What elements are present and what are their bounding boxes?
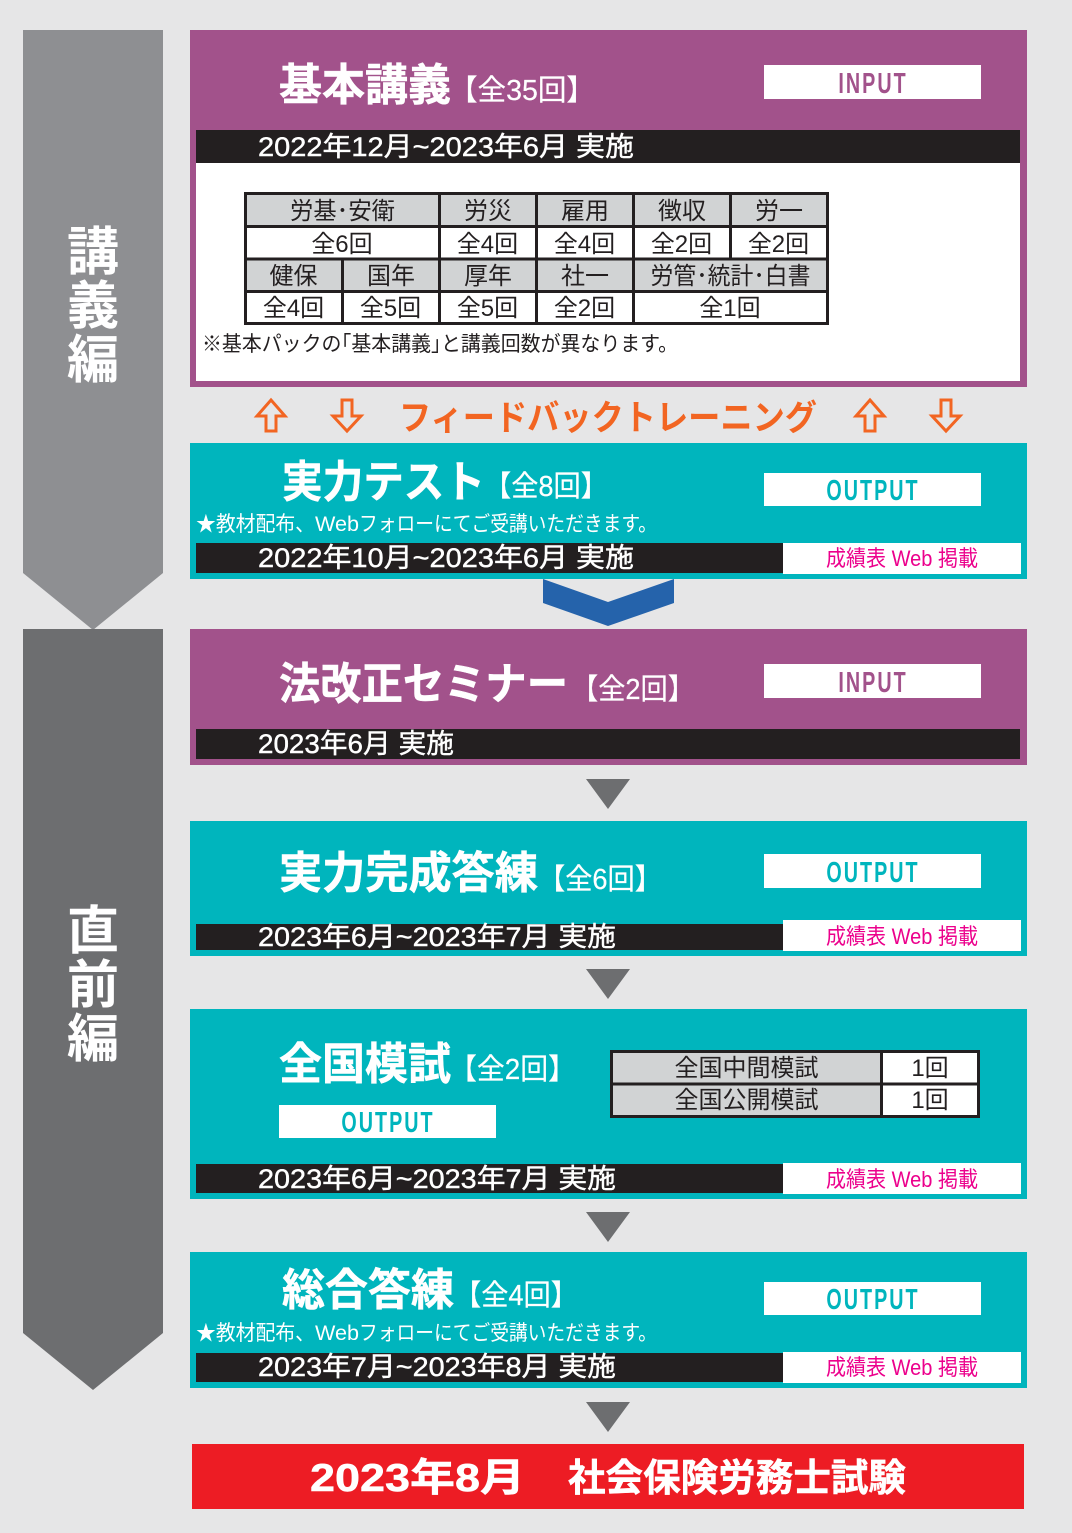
table: 講義回数: 全6回 — [311, 231, 373, 258]
table: 全国模試: 1回 — [911, 1087, 949, 1114]
panel: 総合答練: 総合答練 — [282, 1266, 454, 1315]
panel: 基本講義: 2022年12月~2023年6月 実施 — [258, 132, 634, 162]
left arrow: 講義編: 講 — [67, 224, 119, 282]
panel: 総合答練 — [190, 1252, 1027, 1388]
panel: 総合答練: 【全4回】 — [454, 1279, 578, 1312]
left arrow: 講義編: 義 — [67, 278, 119, 336]
table: 全国模試: 全国中間模試 — [674, 1055, 818, 1082]
panel: 全国模試: OUTPUT — [341, 1107, 435, 1139]
panel: 全国模試: 全国模試 — [279, 1040, 451, 1089]
panel: 基本講義 — [190, 30, 1027, 387]
panel: 法改正セミナー: 【全2回】 — [571, 673, 695, 706]
panel: 法改正セミナー: INPUT — [838, 667, 908, 699]
table: 講義回数: 厚年 — [464, 263, 512, 290]
table: 講義回数: 全2回 — [651, 231, 712, 258]
table: 講義回数: 社一 — [561, 263, 609, 290]
table: 講義回数: 労基･安衛 — [290, 198, 395, 225]
table: 講義回数: 全2回 — [748, 231, 809, 258]
note: 教材配布 — [196, 513, 657, 536]
panel: 実力テスト — [190, 443, 1027, 579]
note: 教材配布: ★教材配布、 — [196, 1322, 315, 1345]
table: 全国模試: 1回 — [911, 1055, 949, 1082]
table: 講義回数: 全4回 — [554, 231, 615, 258]
note: 教材配布: Web — [315, 513, 359, 536]
note: 教材配布: フォローにてご受講いただきます。 — [359, 513, 657, 536]
panel: 実力完成答練: 2023年6月~2023年7月 実施 — [258, 922, 616, 952]
panel: 基本講義: INPUT — [838, 68, 908, 100]
panel: 総合答練: 成績表 Web 掲載 — [826, 1355, 978, 1380]
left arrow: 直前編: 直 — [67, 903, 119, 961]
panel: 実力テスト: 成績表 Web 掲載 — [826, 546, 978, 571]
note: 教材配布: フォローにてご受講いただきます。 — [359, 1322, 657, 1345]
table: 講義回数: 全1回 — [699, 295, 761, 322]
panel: 法改正セミナー: 2023年6月 実施 — [258, 729, 454, 759]
panel: 全国模試 — [190, 1009, 1027, 1199]
table: 講義回数: 労管･統計･白書 — [650, 263, 810, 290]
table: 講義回数: 全4回 — [457, 231, 518, 258]
note: 教材配布: Web — [315, 1322, 359, 1345]
panel: 基本講義: 基本講義 — [279, 61, 451, 110]
left arrow: 直前編: 編 — [67, 1011, 119, 1069]
table: 講義回数: 全5回 — [457, 295, 518, 322]
panel: 全国模試: 2023年6月~2023年7月 実施 — [258, 1164, 616, 1194]
table: 講義回数: 徴収 — [658, 198, 706, 225]
table: 講義回数: 国年 — [367, 263, 415, 290]
banner: 試験 — [192, 1444, 1024, 1509]
table: 講義回数: 全2回 — [554, 295, 615, 322]
table: 講義回数: 労一 — [755, 198, 803, 225]
arrow: down — [586, 1212, 630, 1242]
table: 講義回数: 健保 — [270, 263, 318, 290]
note: 教材配布 — [196, 1322, 657, 1345]
table: 全国模試 — [612, 1052, 978, 1116]
panel: 実力完成答練: 【全6回】 — [538, 863, 662, 896]
panel: 実力テスト: 実力テスト — [282, 458, 485, 507]
panel: 実力テスト: OUTPUT — [826, 475, 920, 507]
panel: 全国模試: 【全2回】 — [449, 1053, 576, 1086]
note: 教材配布: ★教材配布、 — [196, 513, 315, 536]
left arrow: 講義編 — [23, 30, 163, 630]
panel: 総合答練: OUTPUT — [826, 1284, 920, 1316]
banner: 試験: 2023年8月 — [310, 1457, 525, 1500]
panel: 基本講義: 【全35回】 — [449, 74, 595, 107]
table: 講義回数: 全5回 — [360, 295, 421, 322]
banner: 試験: 社会保険労務士試験 — [568, 1458, 906, 1500]
left arrow: 講義編: 編 — [67, 332, 119, 390]
left arrow: 直前編 — [23, 629, 163, 1390]
arrow: down — [586, 779, 630, 809]
arrow: down — [586, 969, 630, 999]
table: 講義回数: 労災 — [464, 198, 512, 225]
arrow: down — [586, 1402, 630, 1432]
table: 講義回数: 雇用 — [561, 198, 609, 225]
arrow: blue chevron — [543, 579, 674, 626]
table: 講義回数: 全4回 — [263, 295, 324, 322]
panel: 全国模試: 成績表 Web 掲載 — [826, 1167, 978, 1192]
panel: 実力テスト: 【全8回】 — [484, 470, 608, 503]
note: ※基本パックの｢基本講義｣と講義回数が異なります。 — [202, 333, 678, 356]
panel: 実力完成答練: 成績表 Web 掲載 — [826, 924, 978, 949]
panel: 法改正セミナー — [190, 629, 1027, 765]
left arrow: 直前編: 前 — [67, 957, 119, 1015]
panel: 法改正セミナー: 法改正セミナー — [279, 660, 568, 709]
table: 講義回数 — [246, 194, 828, 324]
feedback training label and arrows: フィードバックトレーニング — [399, 399, 817, 438]
panel: 総合答練: 2023年7月~2023年8月 実施 — [258, 1352, 616, 1382]
panel: 実力テスト: 2022年10月~2023年6月 実施 — [258, 543, 634, 573]
table: 全国模試: 全国公開模試 — [674, 1087, 818, 1114]
panel: 実力完成答練: OUTPUT — [826, 857, 920, 889]
feedback training label and arrows — [257, 399, 960, 438]
panel: 実力完成答練 — [190, 821, 1027, 956]
panel: 実力完成答練: 実力完成答練 — [279, 849, 538, 898]
